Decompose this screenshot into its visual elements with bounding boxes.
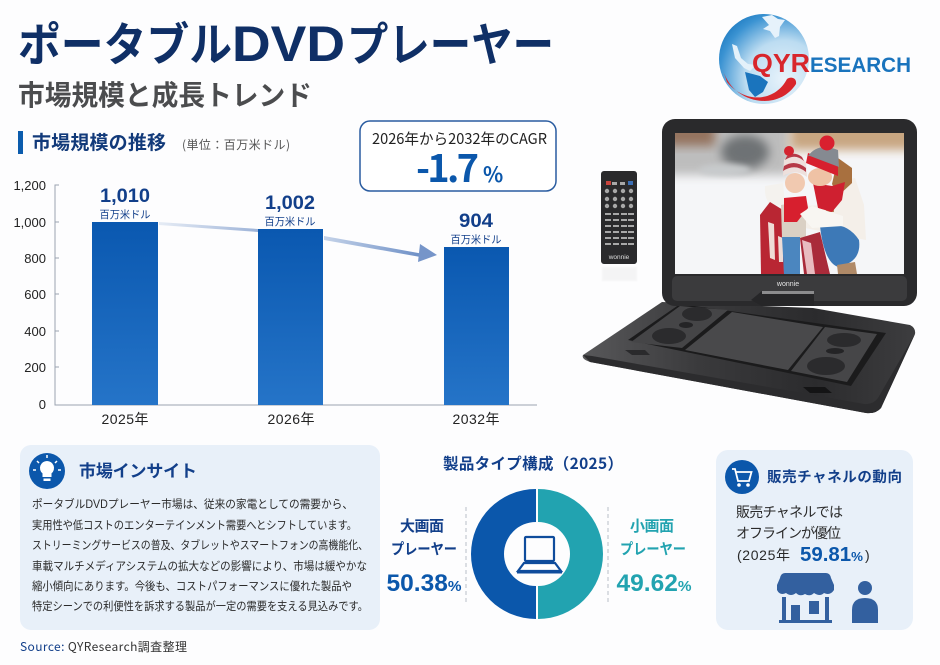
icon: store xyxy=(777,573,834,623)
segment: large screen xyxy=(471,489,536,619)
label: small screen: 小画面 xyxy=(630,518,674,535)
callout: CAGR: 2026年から2032年のCAGR xyxy=(372,128,547,149)
y axis: 1,200 xyxy=(13,178,46,193)
value labels: 百万米ドル xyxy=(100,208,150,221)
callout: CAGR: -1.7 xyxy=(416,138,479,193)
value labels: 1,010 xyxy=(100,186,150,207)
segment: small screen xyxy=(538,489,603,619)
bar chart: market size xyxy=(13,178,537,427)
label: large screen xyxy=(386,517,462,597)
body text: 特定シーンでの利便性を訴求する製品が一定の需要を支える見込みです。 xyxy=(32,599,368,613)
label: small screen: プレーヤー xyxy=(620,541,686,558)
icon: light bulb xyxy=(29,453,65,489)
callout: CAGR xyxy=(360,121,556,193)
value labels: 百万米ドル xyxy=(450,233,502,246)
bar 2026 xyxy=(258,229,323,405)
callout: CAGR: % xyxy=(483,159,503,189)
remote control: wonnie xyxy=(608,254,630,261)
bar 2032 xyxy=(444,247,509,405)
section heading: market size trend: (単位：百万米ドル) xyxy=(182,136,290,153)
bar 2025 xyxy=(92,222,158,405)
body text: 車載マルチメディアシステムの拡大などの影響により、市場は緩やかな xyxy=(32,559,367,573)
title: ポータブル xyxy=(18,9,232,75)
label: small screen: 49.62% xyxy=(616,570,692,597)
trend arrow xyxy=(159,222,437,262)
x labels xyxy=(102,411,500,427)
body text: ) xyxy=(865,547,870,563)
body text: オフラインが優位 xyxy=(736,525,841,541)
y axis: 1,000 xyxy=(13,215,46,230)
chart title: 製品タイプ構成（2025） xyxy=(443,452,623,474)
icon: person xyxy=(852,581,878,623)
subtitle: 市場規模と成長トレンド xyxy=(18,74,312,114)
title: プレーヤー xyxy=(347,9,554,75)
label: small screen xyxy=(616,518,692,597)
y axis: 800 xyxy=(24,251,46,266)
logo: QYResearch: ESEARCH xyxy=(810,54,911,77)
body text: ポータブルDVDプレーヤー市場は、従来の家電としての需要から、 xyxy=(32,497,353,511)
label: large screen: 大画面 xyxy=(400,517,444,535)
dashed dividers xyxy=(466,507,608,602)
body text: (2025年 xyxy=(737,547,790,563)
y axis: 0 xyxy=(39,397,46,412)
body text: 59.81% xyxy=(800,544,863,566)
logo: QYResearch xyxy=(719,14,911,104)
label: large screen: 50.38% xyxy=(386,570,462,597)
player base xyxy=(583,302,915,413)
y axis xyxy=(13,178,537,412)
body text xyxy=(736,504,870,566)
value labels: 百万米ドル xyxy=(264,215,316,228)
source note: Source: QYResearch調査整理 xyxy=(20,638,187,655)
y axis: 400 xyxy=(24,324,46,339)
panel heading: 市場インサイト xyxy=(79,457,197,482)
player lid xyxy=(660,118,917,306)
icon: portable player xyxy=(517,537,562,572)
screen photo xyxy=(675,133,904,274)
section heading: market size trend: 市場規模の推移 xyxy=(32,128,166,155)
x labels: 2032年 xyxy=(452,411,500,427)
body text: ストリーミングサービスの普及、タブレットやスマートフォンの高機能化、 xyxy=(32,538,368,552)
panel: sales channel xyxy=(716,450,913,630)
player lid: wonnie xyxy=(776,281,799,288)
panel: market insight xyxy=(20,445,380,630)
logo: QYResearch: QYR xyxy=(752,48,810,78)
icon: cart xyxy=(725,460,759,494)
value labels: 1,002 xyxy=(265,193,315,214)
remote control xyxy=(601,171,637,281)
product image: portable DVD player xyxy=(583,118,917,413)
x labels: 2025年 xyxy=(102,411,148,427)
value labels: 904 xyxy=(459,211,493,232)
body text: 縮小傾向にあります。今後も、コストパフォーマンスに優れた製品や xyxy=(32,579,352,593)
girl xyxy=(765,184,784,206)
label: large screen: プレーヤー xyxy=(391,541,457,558)
y axis: 600 xyxy=(24,287,46,302)
body text: 販売チャネルでは xyxy=(736,504,843,520)
x labels: 2026年 xyxy=(268,411,314,427)
donut chart: product type mix xyxy=(386,452,692,619)
body text xyxy=(32,497,368,613)
body text: 実用性や低コストのエンターテインメント需要へとシフトしています。 xyxy=(32,518,357,532)
title xyxy=(18,9,554,75)
panel heading: 販売チャネルの動向 xyxy=(767,466,902,487)
woman xyxy=(800,178,866,240)
value labels xyxy=(100,186,502,246)
title: DVD xyxy=(232,16,345,72)
y axis: 200 xyxy=(24,360,46,375)
section heading: market size trend xyxy=(18,128,290,155)
